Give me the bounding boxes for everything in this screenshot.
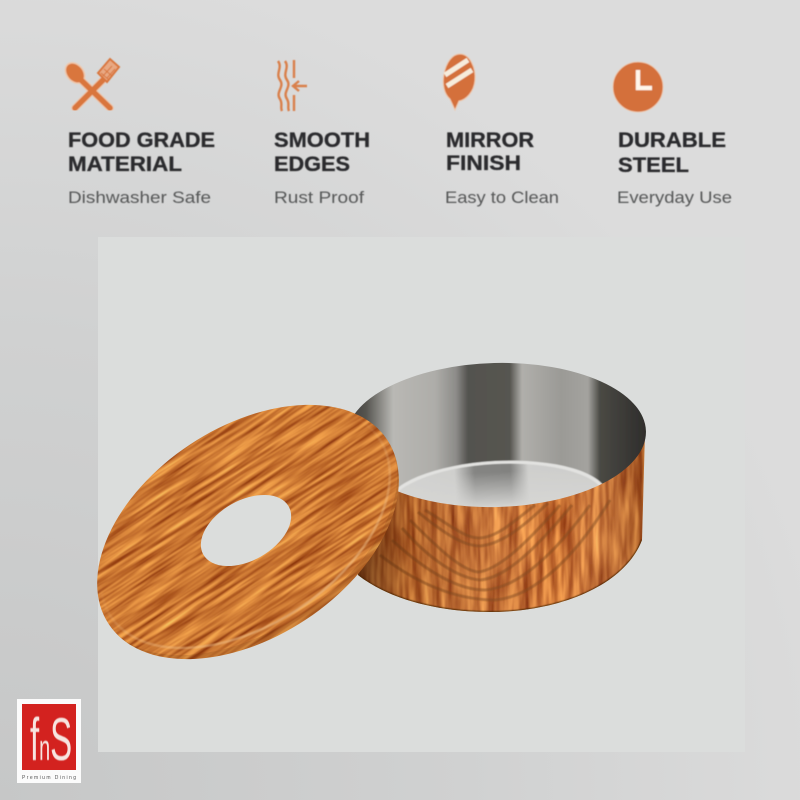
heading: food grade material: MATERIAL xyxy=(68,153,182,176)
heading: food grade material: FOOD GRADE xyxy=(68,129,215,152)
icon: mirror finish xyxy=(443,54,475,110)
heading: smooth edges: SMOOTH xyxy=(274,129,370,152)
text: easy to clean: Easy to Clean xyxy=(445,188,559,207)
heading: mirror finish xyxy=(446,129,534,175)
text: rust proof: Rust Proof xyxy=(274,188,364,207)
heading: smooth edges xyxy=(274,129,370,176)
heading: durable steel: DURABLE xyxy=(618,129,726,152)
lid xyxy=(97,404,399,660)
icon: smooth edges xyxy=(278,60,307,111)
logo: fnS Premium Dining xyxy=(17,699,81,783)
heading: food grade material xyxy=(68,129,215,176)
heading: mirror finish: FINISH xyxy=(446,152,521,175)
logo: fnS Premium Dining: fnS xyxy=(30,707,72,774)
bowl body xyxy=(358,440,645,612)
heading: durable steel xyxy=(618,129,726,177)
icon: crossed spoon and fork xyxy=(60,58,119,108)
bowl interior steel xyxy=(355,362,646,508)
product: wood finish container with lid xyxy=(97,362,646,660)
icon: clock xyxy=(613,62,663,112)
panel: feature row xyxy=(60,54,732,207)
heading: smooth edges: EDGES xyxy=(274,153,350,176)
panel: product backdrop xyxy=(98,237,745,752)
logo: fnS Premium Dining: Premium Dining xyxy=(22,775,76,781)
text: everyday use: Everyday Use xyxy=(617,188,732,207)
heading: mirror finish: MIRROR xyxy=(446,129,534,152)
text: dishwasher safe: Dishwasher Safe xyxy=(68,188,211,207)
heading: durable steel: STEEL xyxy=(618,154,689,177)
